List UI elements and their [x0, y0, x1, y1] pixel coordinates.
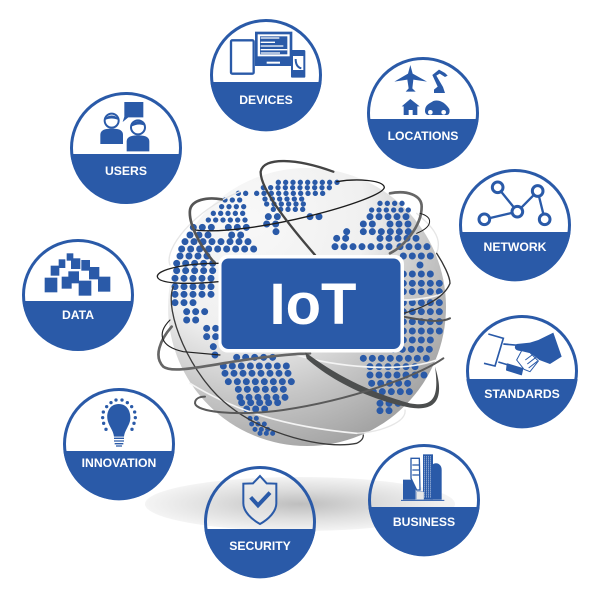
badge: security — [204, 468, 316, 578]
badge: users: USERS — [105, 164, 147, 178]
badge: locations: LOCATIONS — [388, 129, 458, 143]
world map dots — [175, 182, 443, 433]
badge: locations — [367, 58, 479, 168]
badge: business: BUSINESS — [393, 515, 455, 529]
icon: light bulb — [101, 398, 137, 446]
globe with orbit rings — [157, 161, 450, 446]
ground shadow — [145, 477, 455, 531]
badge: devices — [210, 20, 322, 131]
icon: devices — [231, 32, 305, 78]
badge: network — [459, 170, 571, 281]
IoT central badge: IoT — [270, 272, 356, 337]
badge: data: DATA — [62, 308, 94, 322]
badge: business — [368, 446, 480, 556]
IoT central badge — [218, 255, 404, 352]
badge: standards — [466, 316, 578, 428]
badge: standards: STANDARDS — [484, 387, 560, 401]
icon: buildings — [401, 454, 444, 500]
icon: users — [100, 102, 149, 151]
badge: innovation: INNOVATION — [82, 456, 156, 470]
badge: data — [22, 240, 134, 350]
icon: handshake — [484, 333, 562, 375]
icon: shield — [243, 476, 276, 524]
badge: innovation — [63, 390, 175, 500]
orbit rings — [157, 161, 450, 445]
icon: data blocks — [45, 253, 110, 296]
badge: devices: DEVICES — [239, 93, 293, 107]
icon: network — [479, 182, 550, 225]
badge: users — [70, 94, 182, 203]
badge: network: NETWORK — [484, 240, 547, 254]
badge: security: SECURITY — [229, 539, 291, 553]
icon: locations — [394, 65, 450, 115]
